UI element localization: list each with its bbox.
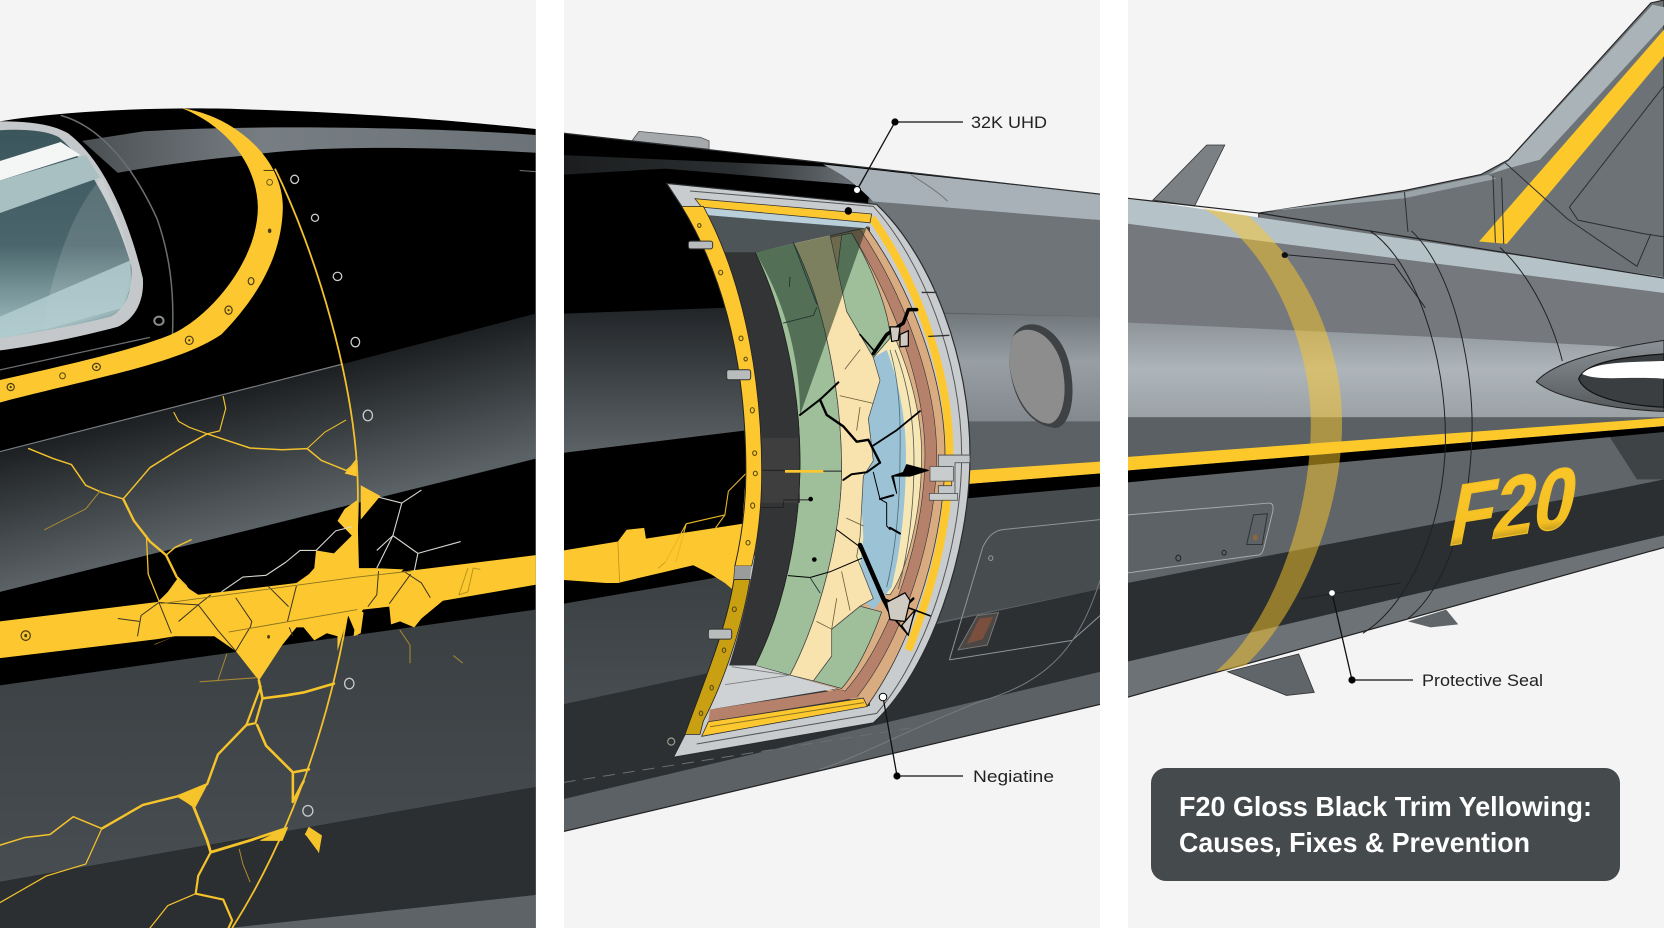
panel seam lines (1288, 230, 1563, 634)
small dorsal fin (1153, 145, 1225, 206)
yellow trim arc (872, 218, 949, 650)
charcoal inner wall (748, 252, 800, 666)
canopy window (0, 115, 173, 370)
panel: middle background (564, 0, 1100, 928)
panel seam arc (232, 169, 358, 928)
fuselage right section (564, 133, 1100, 832)
dark cracks on yellow (118, 568, 480, 651)
silver frame (667, 183, 970, 757)
opening base (703, 214, 870, 736)
callout: 32K UHD: 32K UHD (971, 113, 1047, 132)
title box (1151, 768, 1620, 881)
fuselage body (0, 108, 536, 928)
fuselage bands (1128, 198, 1664, 697)
title box: Causes, Fixes & Prevention (1179, 827, 1530, 858)
callout: Negiatine: Negiatine (973, 767, 1054, 786)
yellow cracks on upper panel (29, 397, 357, 601)
yellow cracks on lower panel (0, 630, 462, 928)
callout: 32K UHD (854, 113, 1047, 194)
paint layer arcs (755, 227, 945, 706)
panel: cutaway paint layers (564, 131, 1100, 832)
callout: Protective Seal: Protective Seal (1422, 671, 1543, 690)
wing stub (1536, 340, 1664, 411)
panel: cracked gloss black trim fuselage (0, 108, 536, 928)
yellow flange (682, 206, 762, 734)
white cracks on black stripe (221, 490, 461, 592)
title box: F20 Gloss Black Trim Yellowing: (1179, 791, 1592, 822)
black cracks through layers (783, 243, 930, 635)
rivet rings (154, 133, 372, 816)
icon: porthole (1009, 324, 1073, 428)
F20 lettering: F20 (1442, 448, 1586, 565)
callout: Negiatine (879, 693, 1054, 786)
bracket and fractured clips (887, 292, 970, 635)
translucent yellow band (1203, 208, 1342, 672)
panel: right background (1128, 0, 1664, 928)
yellow cockpit trim (0, 108, 283, 402)
callout: Protective Seal (1329, 590, 1543, 690)
ceiling and floor of cutaway (695, 199, 872, 736)
tail fin (1259, 0, 1664, 284)
yellow stripe with flaking (0, 459, 536, 681)
fuselage left section (564, 131, 1100, 832)
lower fins (1228, 610, 1458, 695)
access panel (668, 520, 1100, 769)
small hatch (1128, 503, 1273, 573)
panel: sealed fuselage and tail (1128, 0, 1664, 697)
panel: left background (0, 0, 536, 928)
fastener tabs (688, 241, 751, 639)
small markers in cutaway (762, 207, 852, 562)
